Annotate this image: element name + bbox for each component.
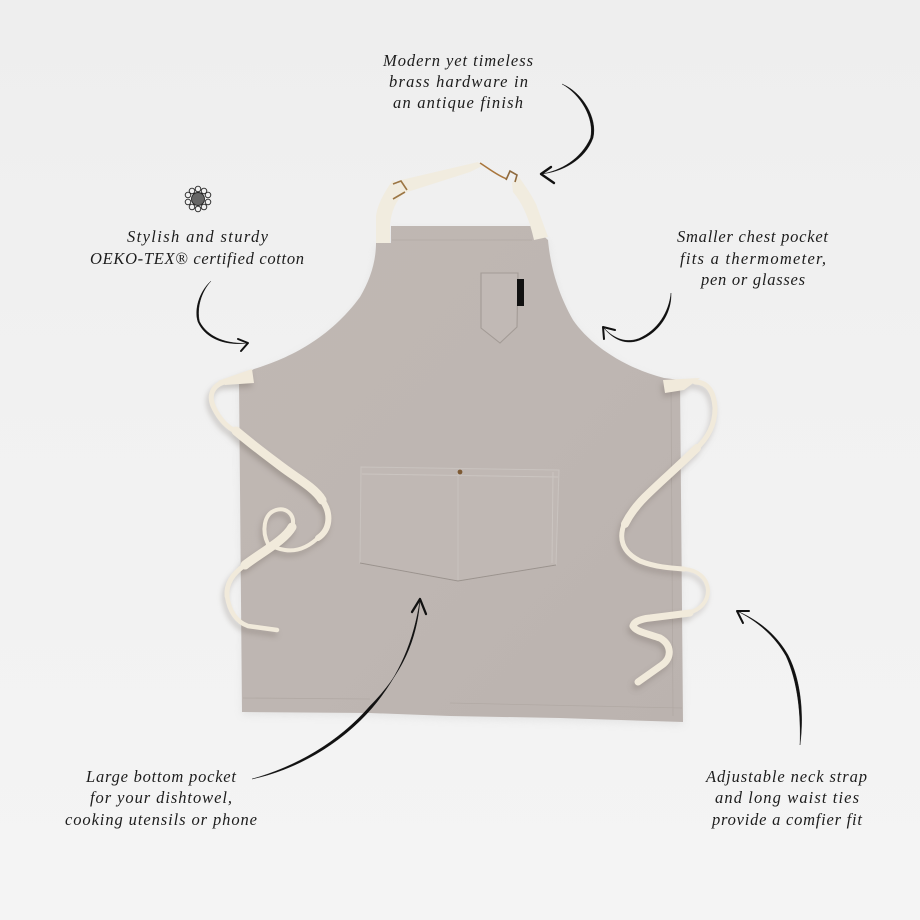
- text: brass hardware: brass hardware in: [389, 72, 528, 91]
- text: bottom pocket: cooking utensils or phone: [65, 810, 257, 829]
- text: bottom pocket: [65, 767, 257, 829]
- text: neck strap and ties: Adjustable neck strap: [705, 767, 867, 786]
- brass rivet: [458, 470, 462, 474]
- text: certified cotton: Stylish and sturdy: [127, 227, 269, 246]
- bottom pocket: [360, 467, 559, 581]
- text: neck strap and ties: [705, 767, 867, 829]
- arrow: to brass hardware: [541, 84, 594, 183]
- right waist tie: [622, 378, 715, 682]
- icon: OEKO-TEX flower: [185, 186, 211, 212]
- text: chest pocket: pen or glasses: [700, 270, 805, 289]
- text: brass hardware: Modern yet timeless: [382, 51, 533, 70]
- left waist tie: [211, 369, 328, 630]
- arrow: to cotton: [197, 281, 248, 351]
- text: neck strap and ties: and long waist ties: [715, 788, 859, 807]
- text: chest pocket: fits a thermometer,: [680, 249, 826, 268]
- text: chest pocket: [677, 227, 828, 289]
- brand label: [517, 279, 524, 306]
- text: bottom pocket: Large bottom pocket: [85, 767, 236, 786]
- text: certified cotton: OEKO-TEX® certified cotton: [90, 249, 304, 268]
- text: brass hardware: an antique finish: [393, 93, 523, 112]
- text: bottom pocket: for your dishtowel,: [90, 788, 232, 807]
- neck strap: [376, 162, 548, 243]
- text: chest pocket: Smaller chest pocket: [677, 227, 828, 246]
- chest pocket: [481, 273, 524, 343]
- text: certified cotton: [90, 227, 304, 268]
- text: brass hardware: [382, 51, 533, 112]
- arrow: to chest pocket: [603, 293, 671, 342]
- apron: [239, 226, 683, 725]
- arrow: to straps: [737, 611, 802, 745]
- brass hardware: [393, 163, 517, 199]
- arrow: to bottom pocket: [252, 599, 426, 779]
- text: neck strap and ties: provide a comfier fit: [711, 810, 862, 829]
